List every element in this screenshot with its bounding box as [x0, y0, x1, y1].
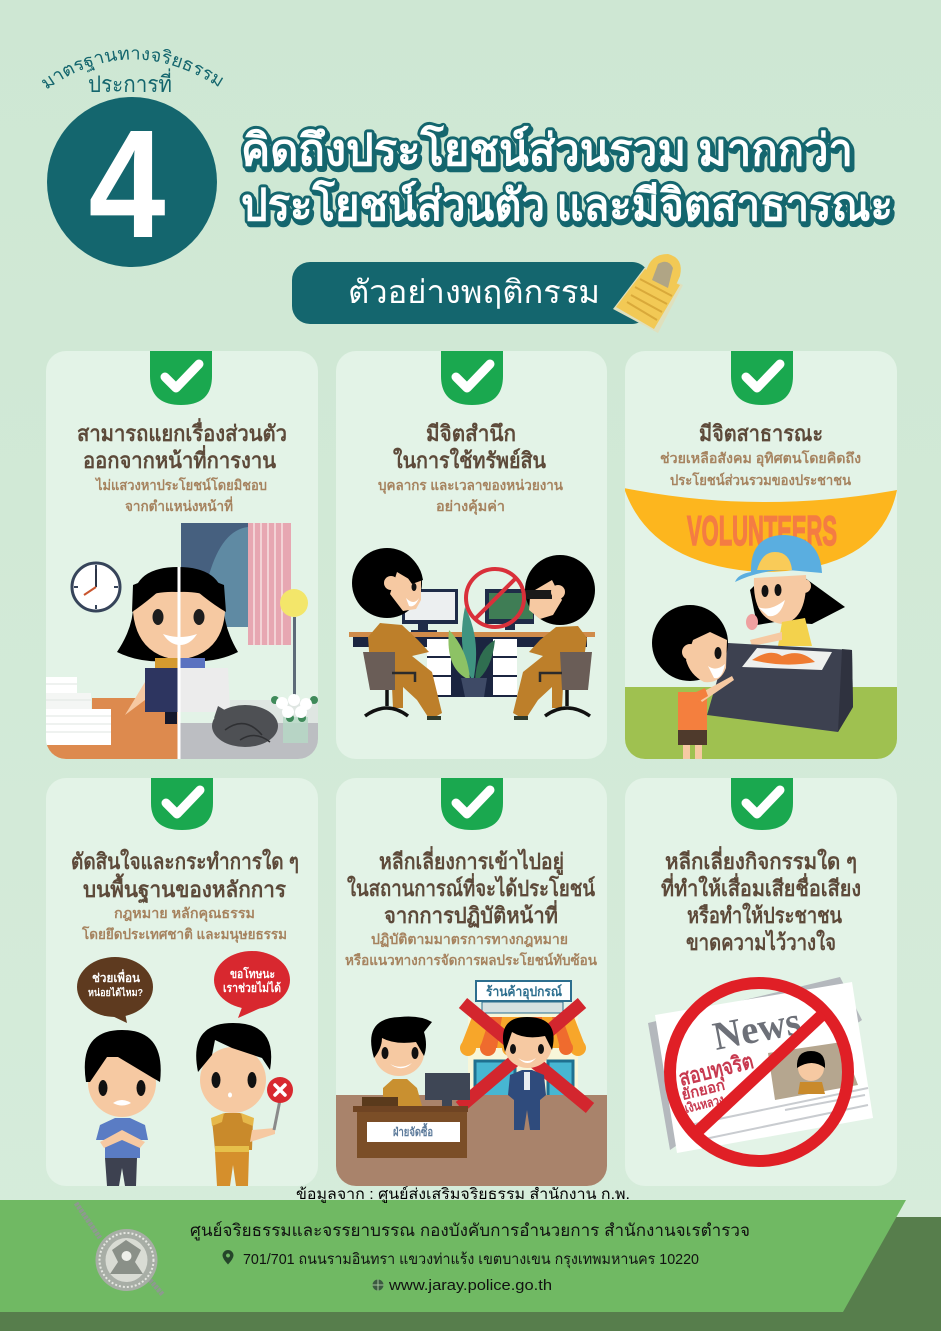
illustration: volunteer booth	[624, 488, 897, 759]
heading: ในการใช้ทรัพย์สิน	[393, 447, 546, 473]
speech bubble: friend request: หน่อยได้ไหม?	[88, 986, 143, 999]
description: อย่างคุ้มค่า	[436, 498, 505, 515]
icon: check shield	[151, 778, 213, 830]
footer	[0, 1200, 941, 1331]
speech bubble: refusal: เราช่วยไม่ได้	[223, 980, 281, 995]
description: ช่วยเหลือสังคม อุทิศตนโดยคิดถึง	[660, 449, 861, 467]
illustration: shop and officer: ร้านค้าอุปกรณ์	[486, 984, 562, 1000]
source note: ข้อมูลจาก : ศูนย์ส่งเสริมจริยธรรม สำนักงาน ก.พ.	[296, 1186, 630, 1203]
heading: ตัดสินใจและกระทำการใด ๆ	[71, 848, 299, 874]
illustration: newspaper: เงินหลวง	[683, 1092, 726, 1116]
number 4: 4	[88, 98, 166, 271]
website: www.jaray.police.go.th	[388, 1277, 552, 1294]
heading: จากการปฏิบัติหน้าที่	[384, 899, 558, 928]
speech bubble: refusal	[214, 951, 290, 1018]
heading	[347, 845, 595, 928]
description: จากตำแหน่งหน้าที่	[125, 496, 233, 514]
speech bubble: friend request	[77, 957, 153, 1023]
title: ประโยชน์ส่วนตัว และมีจิตสาธารณะ	[241, 178, 893, 230]
panel: avoid conflicts of interest	[336, 778, 607, 1186]
illustration: woman half work half home	[46, 523, 318, 759]
illustration: officer refusing	[196, 1023, 275, 1186]
section pill: behaviour examples	[292, 262, 650, 324]
title: คิดถึงประโยชน์ส่วนรวม มากกว่า	[241, 123, 853, 175]
illustration: shop and officer	[336, 981, 607, 1186]
heading: สามารถแยกเรื่องส่วนตัว	[77, 417, 287, 446]
description	[378, 477, 563, 515]
illustration: two officers at desks	[349, 548, 595, 720]
icon: check shield	[731, 778, 793, 830]
heading: บนพื้นฐานของหลักการ	[83, 873, 286, 904]
description	[81, 905, 287, 943]
illustration: newspaper: สอบทุจริต	[676, 1048, 756, 1093]
description: หรือแนวทางการจัดการผลประโยชน์ทับซ้อน	[345, 951, 597, 968]
desk label: ฝ่ายจัดซื้อ	[393, 1122, 433, 1139]
number circle	[47, 97, 217, 267]
icon: check shield	[731, 351, 793, 405]
heading	[661, 845, 861, 955]
heading: มีจิตสำนึก	[426, 421, 516, 446]
speech bubble: refusal: ขอโทษนะ	[230, 966, 275, 981]
icon: check shield	[441, 351, 503, 405]
icon: check shield	[441, 778, 503, 830]
left officer	[352, 548, 442, 720]
panel: conscious use of resources	[336, 351, 607, 759]
speech bubble: friend request: ช่วยเพื่อน	[92, 969, 141, 985]
header badge: standard number 4	[42, 49, 224, 271]
heading	[71, 848, 299, 904]
illustration: newspaper	[648, 977, 873, 1153]
icon: epaulette	[613, 254, 683, 333]
desk label	[367, 1122, 460, 1142]
illustration: civilian friend	[85, 1030, 161, 1186]
description	[345, 931, 597, 968]
icon: globe	[372, 1280, 384, 1290]
icon: map pin	[222, 1250, 234, 1264]
description	[94, 476, 267, 514]
title	[241, 123, 893, 230]
heading: ออกจากหน้าที่การงาน	[83, 444, 276, 473]
heading: มีจิตสาธารณะ	[699, 421, 823, 446]
address: 701/701 ถนนรามอินทรา แขวงท่าแร้ง เขตบางเขน กรุงเทพมหานคร 10220	[243, 1251, 699, 1269]
heading: หลีกเลี่ยงกิจกรรมใด ๆ	[665, 845, 857, 874]
heading: ขาดความไว้วางใจ	[686, 929, 836, 955]
icon: police seal with sword	[76, 1203, 163, 1295]
heading: ในสถานการณ์ที่จะได้ประโยชน์	[347, 872, 595, 901]
icon: prohibition sign	[466, 569, 524, 627]
section pill: behaviour examples: ตัวอย่างพฤติกรรม	[348, 274, 600, 310]
right officer	[513, 555, 595, 720]
organisation name: ศูนย์จริยธรรมและจรรยาบรรณ กองบังคับการอำนวยการ สำนักงานจเรตำรวจ	[190, 1221, 750, 1241]
icon: check shield	[150, 351, 212, 405]
description: กฎหมาย หลักคุณธรรม	[114, 905, 255, 922]
subheading: ประการที่	[88, 68, 172, 97]
heading: ที่ทำให้เสื่อมเสียชื่อเสียง	[661, 872, 861, 901]
illustration: newspaper: News	[709, 998, 804, 1059]
description: บุคลากร และเวลาของหน่วยงาน	[378, 477, 563, 494]
heading	[77, 417, 287, 473]
description: ไม่แสวงหาประโยชน์โดยมิชอบ	[94, 476, 267, 493]
illustration: newspaper: ยักยอก	[680, 1077, 727, 1104]
panel: separate personal matters	[46, 351, 318, 759]
description: ปฏิบัติตามมาตรการทางกฎหมาย	[371, 931, 568, 948]
heading: หรือทำให้ประชาชน	[687, 902, 842, 928]
description: โดยยึดประเทศชาติ และมนุษยธรรม	[81, 925, 287, 943]
icon: prohibition sign	[670, 983, 848, 1161]
description	[660, 449, 861, 488]
panel: public consciousness	[624, 351, 897, 759]
description: ประโยชน์ส่วนรวมของประชาชน	[670, 471, 851, 488]
heading	[393, 421, 546, 473]
panel: avoid reputation damage	[625, 778, 897, 1186]
panel: decide on principles	[46, 778, 318, 1186]
heading: หลีกเลี่ยงการเข้าไปอยู่	[379, 845, 564, 876]
icon: stop sign	[267, 1077, 293, 1130]
arc heading: มาตรฐานทางจริยธรรม	[42, 49, 224, 88]
